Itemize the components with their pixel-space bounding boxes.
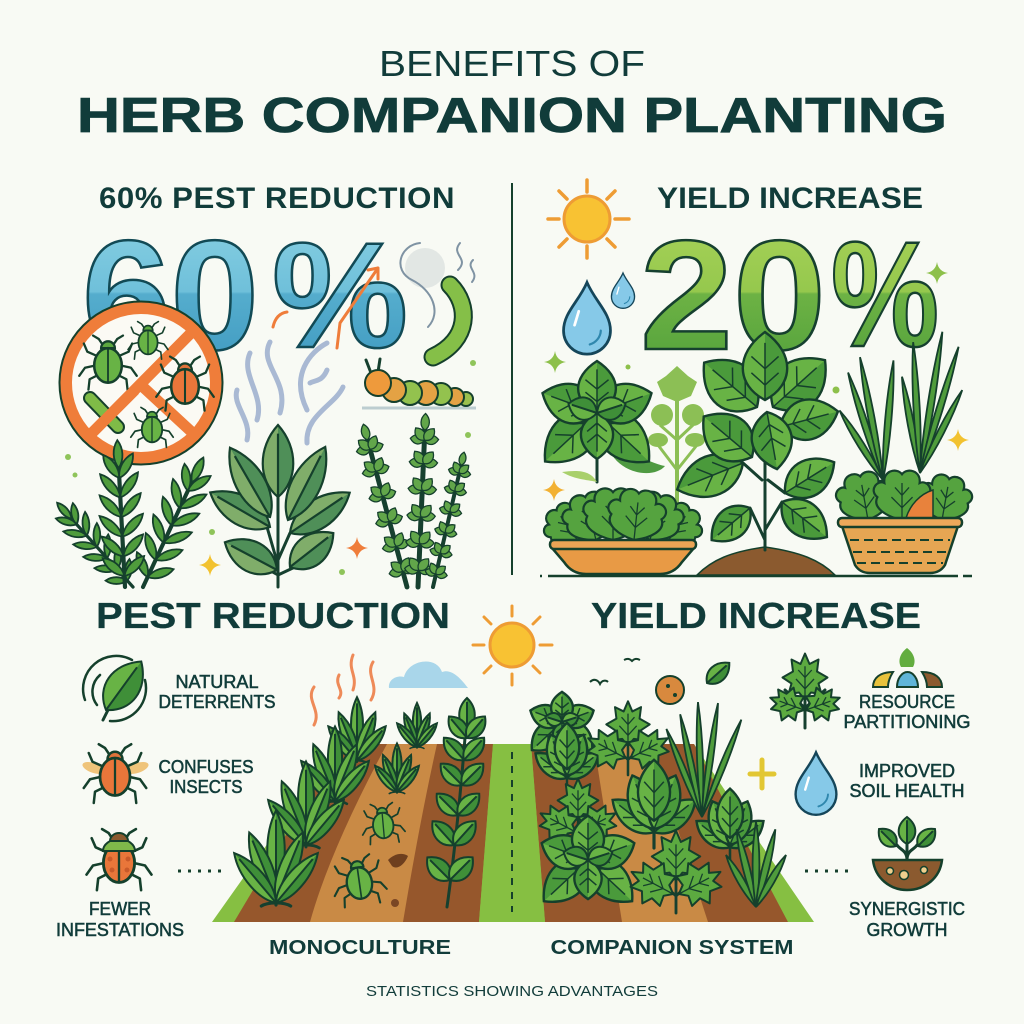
item: confuses insects: CONFUSES	[158, 757, 254, 777]
center path line	[511, 752, 513, 912]
monoculture plants	[227, 697, 491, 909]
item: resource partitioning: RESOURCE	[859, 692, 955, 712]
plant: leafy bowl	[536, 487, 710, 574]
plant: rosemary	[43, 439, 225, 600]
big number 20%	[640, 209, 939, 383]
item: fewer infestations: INFESTATIONS	[56, 920, 184, 940]
icon: sun lower	[473, 606, 552, 685]
icon: ladybug	[86, 829, 152, 890]
plant: large central herb	[670, 332, 844, 552]
companion plants	[524, 692, 789, 914]
big number 60%: 60	[82, 209, 259, 383]
big number 60%: %	[272, 211, 408, 379]
soil: monoculture	[234, 744, 493, 922]
item: improved soil health: IMPROVED	[859, 761, 955, 781]
item: natural deterrents: NATURAL	[176, 672, 258, 692]
big number 20%: %	[831, 210, 939, 378]
item: confuses insects	[81, 744, 254, 803]
plant: basil	[531, 361, 665, 482]
plant: thyme	[350, 413, 475, 591]
item: resource partitioning	[764, 648, 970, 732]
panel: 60% pest reduction	[43, 182, 476, 600]
icon: sprout in soil	[873, 817, 942, 890]
plant: vegetable basket	[833, 468, 975, 573]
icon: caterpillar	[362, 359, 476, 408]
icon: parsley	[764, 654, 846, 728]
icon: beetle with wings	[81, 744, 150, 803]
divider	[511, 183, 513, 575]
label: companion system: COMPANION SYSTEM	[550, 937, 794, 959]
soil mound	[697, 547, 835, 575]
item: fewer infestations	[56, 829, 222, 940]
item: synergistic growth: SYNERGISTIC	[849, 899, 965, 919]
plant: parsley background	[648, 366, 705, 510]
big number 20%: 20	[640, 209, 826, 383]
icon: resource arcs	[873, 648, 942, 687]
plant: chives	[837, 331, 965, 482]
heat waves	[311, 655, 374, 725]
item: synergistic growth	[805, 817, 965, 940]
heading: yield increase: YIELD INCREASE	[657, 182, 923, 215]
icon: sun	[548, 180, 629, 258]
big number 60%	[82, 209, 408, 383]
icon: smoke and caterpillar on leaf	[400, 243, 474, 357]
heading: yield increase lower: YIELD INCREASE	[591, 595, 921, 636]
item: natural deterrents	[83, 652, 275, 721]
item: fewer infestations: FEWER	[89, 899, 151, 919]
item: improved soil health	[796, 752, 964, 815]
plant: sage	[203, 425, 358, 587]
pests in field	[330, 802, 408, 909]
icon: water drops	[564, 273, 635, 354]
item: natural deterrents: DETERRENTS	[158, 692, 276, 712]
accent sparkles	[65, 360, 476, 576]
arrows	[273, 268, 378, 348]
sparkles	[543, 262, 969, 501]
item: improved soil health: SOIL HEALTH	[850, 781, 964, 801]
sparkle	[750, 760, 774, 788]
ground line	[540, 575, 972, 577]
item: confuses insects: INSECTS	[170, 777, 242, 797]
icon: water drop	[796, 752, 836, 815]
icon: leaf in circle	[83, 652, 155, 721]
soil: companion	[531, 744, 788, 922]
title: BENEFITS OF	[379, 43, 645, 84]
dotted leader	[178, 870, 222, 872]
item: resource partitioning: PARTITIONING	[844, 712, 970, 732]
heading: 60% pest reduction: 60% PEST REDUCTION	[99, 182, 455, 215]
panel: 20% yield increase	[531, 180, 975, 576]
dotted leader	[805, 870, 849, 872]
item: synergistic growth: GROWTH	[866, 920, 948, 940]
birds and floating icons	[590, 657, 735, 704]
label: monoculture: MONOCULTURE	[269, 937, 451, 959]
icon: crossed-out pests	[60, 302, 222, 464]
footer caption: STATISTICS SHOWING ADVANTAGES	[366, 983, 658, 1000]
grass base	[212, 744, 814, 922]
center strip	[479, 744, 545, 922]
title: HERB COMPANION PLANTING	[77, 89, 947, 143]
heading: pest reduction: PEST REDUCTION	[96, 595, 450, 636]
title	[77, 43, 947, 143]
icon: cloud	[389, 661, 468, 688]
field illustration	[212, 692, 814, 922]
icon: scent wisps	[236, 342, 343, 443]
